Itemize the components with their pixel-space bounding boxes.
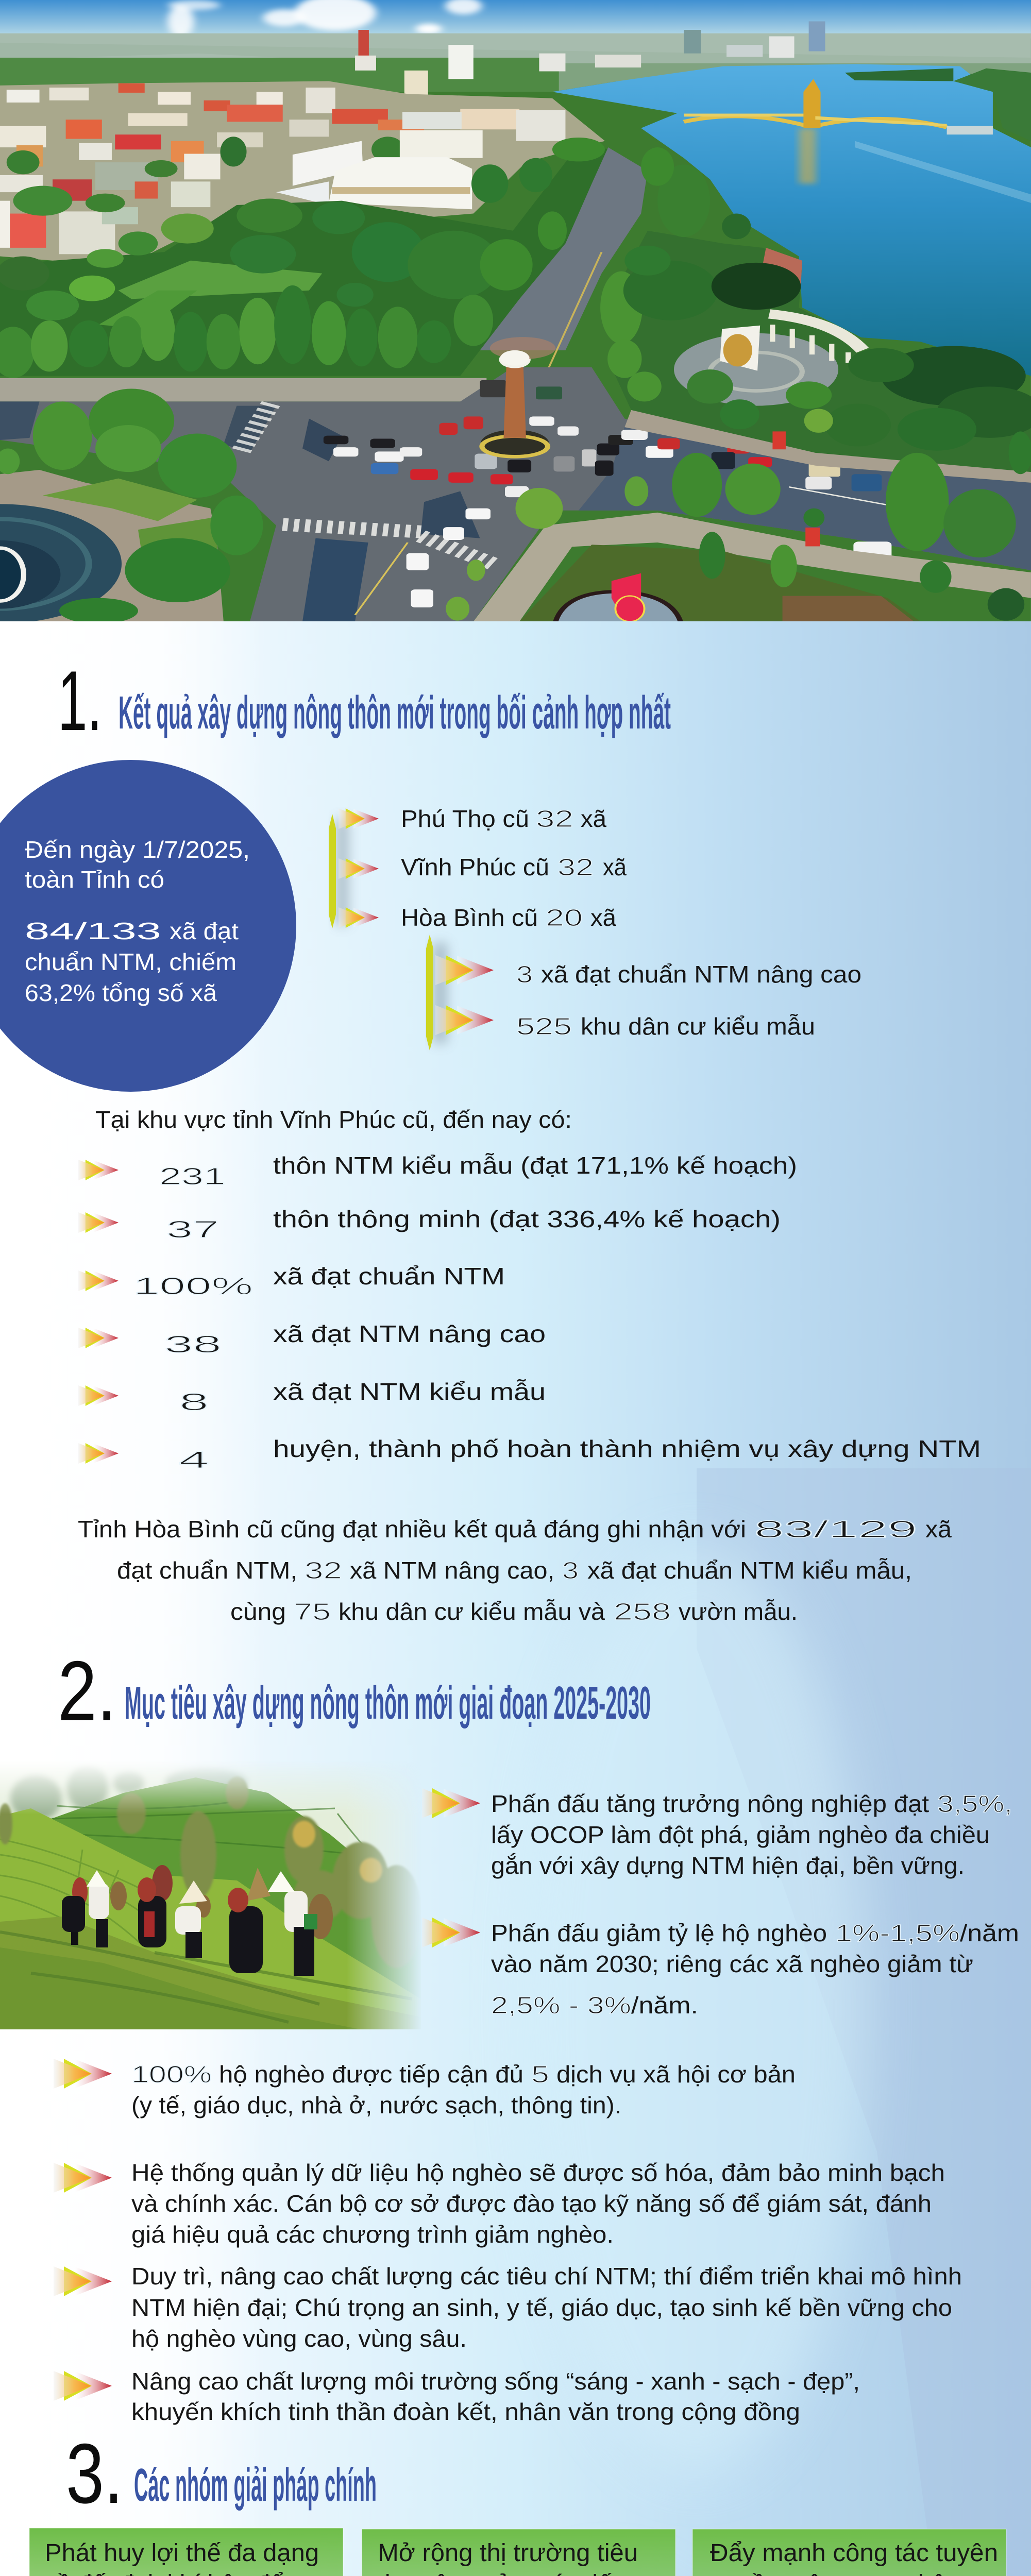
goals list: growth and poverty reduction: Phấn đấu giảm tỷ lệ hộ nghèo [491,1920,827,1946]
text block: Hoa Binh results: khu dân cư kiểu mẫu và [339,1598,605,1625]
tea pickers [62,1865,333,1976]
goals list: services, data, criteria, environment: dịch vụ xã hội cơ bản [556,2061,796,2088]
residential district [0,81,605,261]
text block: Hoa Binh results: xã [925,1516,952,1543]
goals list: growth and poverty reduction: 3,5%, [937,1790,1012,1817]
text: Các nhóm giải pháp chính [134,2460,377,2511]
stat list: Vinh Phuc figures: thôn NTM kiểu mẫu (đạt 171,1% kế hoạch) [273,1152,797,1179]
section 2 heading [58,1643,651,1738]
list: communes by former province [329,805,627,931]
goals list: growth and poverty reduction: Phấn đấu tăng trưởng nông nghiệp đạt [491,1790,929,1817]
text block: Hoa Binh results: cùng [230,1598,286,1625]
cars [324,380,891,607]
panel: province total circle: Đến ngày 1/7/2025, [25,836,250,863]
stat list: Vinh Phuc figures: 8 [179,1388,209,1415]
foreground promenade and lawn [474,513,1031,621]
distant city [0,22,1031,95]
text block: Hoa Binh results: 32 [305,1557,342,1584]
list: communes by former province: 20 [546,904,583,931]
text block: Hoa Binh results [78,1516,952,1625]
list: advanced communes and model residential areas: 525 [516,1013,572,1040]
text block: Hoa Binh results: xã đạt chuẩn NTM kiểu mẫu, [587,1557,912,1584]
panel: solution 3: Đẩy mạnh công tác tuyên [710,2539,998,2567]
stat list: Vinh Phuc figures: xã đạt NTM kiểu mẫu [273,1378,546,1405]
goals list: services, data, criteria, environment: và chính xác. Cán bộ cơ sở được đào tạo kỹ năng số để giám sát, đánh [131,2190,932,2217]
goals list: growth and poverty reduction [422,1788,1019,2019]
panel: province total circle [0,760,296,1092]
goals list: growth and poverty reduction: lấy OCOP làm đột phá, giảm nghèo đa chiều [491,1821,990,1848]
intersection asphalt [0,367,1031,621]
lake [552,64,1031,376]
panel: province total circle: 63,2% tổng số xã [25,979,217,1006]
monument tower [481,337,555,457]
stat list: Vinh Phuc figures: 231 [159,1163,226,1190]
list: communes by former province: xã [590,904,616,931]
stat list: Vinh Phuc figures: 100% [133,1273,253,1299]
list: communes by former province: 32 [557,854,594,880]
text block: Hoa Binh results: vườn mẫu. [679,1598,798,1625]
goals list: growth and poverty reduction: gắn với xây dựng NTM hiện đại, bền vững. [491,1852,965,1879]
list: communes by former province: 32 [536,805,573,832]
goals list: services, data, criteria, environment: NTM hiện đại; Chú trọng an sinh, y tế, giáo dục, tạo sinh kế bền vững cho [131,2294,952,2321]
panel: province total circle: toàn Tỉnh có [25,866,164,893]
text block: Hoa Binh results: 3 [562,1557,579,1584]
text block: Hoa Binh results: xã NTM nâng cao, [350,1557,554,1584]
list: communes by former province: Phú Thọ cũ [401,805,529,832]
stat list: Vinh Phuc figures: 37 [166,1216,219,1243]
text: Vinh Phuc intro: Tại khu vực tỉnh Vĩnh Phúc cũ, đến nay có: [95,1106,572,1133]
list: advanced communes and model residential areas: 3 [516,961,533,988]
civic white buildings [276,109,565,209]
goals list: services, data, criteria, environment: hộ nghèo vùng cao, vùng sâu. [131,2325,467,2352]
list: communes by former province: Vĩnh Phúc cũ [401,854,549,880]
hero photo: aerial view of city and lake [0,0,1031,623]
panel: province total circle: chuẩn NTM, chiếm [25,948,236,975]
list: communes by former province: xã [603,854,627,880]
section 3 heading: 3. [66,2426,123,2521]
goals list: services, data, criteria, environment: khuyến khích tinh thần đoàn kết, nhân văn trong cộng đồng [131,2398,800,2425]
panel: solution 1: Phát huy lợi thế đa dạng [45,2539,319,2567]
text block: Hoa Binh results: đạt chuẩn NTM, [117,1557,297,1584]
goals list: growth and poverty reduction: /năm [960,1920,1019,1946]
section 1 heading [58,653,671,748]
goals list: growth and poverty reduction: /năm. [631,1992,698,2019]
goals list: services, data, criteria, environment: Nâng cao chất lượng môi trường sống “sáng - xanh - sạch - đẹp”, [131,2368,860,2395]
stat list: Vinh Phuc figures: thôn thông minh (đạt 336,4% kế hoạch) [273,1206,781,1232]
section 1 heading: 1. [58,653,102,748]
text block: Hoa Binh results: 75 [294,1598,331,1625]
list: advanced communes and model residential areas [426,935,861,1050]
main road [480,147,648,388]
stat list: Vinh Phuc figures: 38 [164,1331,222,1358]
bridge [684,79,993,134]
text block: Hoa Binh results: 83/129 [754,1516,917,1543]
panel: solution 1 [29,2528,343,2576]
section 3 heading [66,2426,377,2521]
text block: Hoa Binh results: 258 [614,1598,671,1625]
list: communes by former province: Hòa Bình cũ [401,904,538,931]
lakeside park and colonnade [600,147,1031,483]
goals list: growth and poverty reduction: 2,5% - 3% [491,1992,631,2019]
goals list: services, data, criteria, environment: giá hiệu quả các chương trình giảm nghèo. [131,2221,614,2248]
goals list: services, data, criteria, environment: Hệ thống quản lý dữ liệu hộ nghèo sẽ được số hóa, đảm bảo minh bạch [131,2159,945,2186]
panel: solution 3 [692,2529,1006,2576]
stat list: Vinh Phuc figures: xã đạt chuẩn NTM [273,1263,505,1290]
panel: province total circle: 84/133 [25,918,161,944]
goals list: growth and poverty reduction: vào năm 2030; riêng các xã nghèo giảm từ [491,1951,973,1977]
list: advanced communes and model residential areas: khu dân cư kiểu mẫu [581,1013,815,1040]
text block: Hoa Binh results: Tỉnh Hòa Bình cũ cũng đạt nhiều kết quả đáng ghi nhận với [78,1516,746,1543]
stat list: Vinh Phuc figures: huyện, thành phố hoàn thành nhiệm vụ xây dựng NTM [273,1435,981,1462]
section 2 heading: 2. [58,1643,116,1738]
roadside trees [446,431,1031,621]
stat list: Vinh Phuc figures: 4 [179,1446,209,1473]
goals list: services, data, criteria, environment: hộ nghèo được tiếp cận đủ [219,2061,523,2088]
panel: solution 2: Mở rộng thị trường tiêu [378,2539,638,2567]
panel: solution 2 [362,2529,675,2576]
sky [0,0,1031,39]
goals list: services, data, criteria, environment: Duy trì, nâng cao chất lượng các tiêu chí NTM; thí điểm triển khai mô hình [131,2263,962,2290]
goals list: services, data, criteria, environment: (y tế, giáo dục, nhà ở, nước sạch, thông tin). [131,2092,621,2119]
goals list: services, data, criteria, environment [54,2059,962,2425]
goals list: services, data, criteria, environment: 5 [531,2061,549,2088]
stat list: Vinh Phuc figures: xã đạt NTM nâng cao [273,1320,546,1347]
list: communes by former province: xã [581,805,606,832]
bottom-left fountain and trees [0,388,263,623]
tree canopy mass [0,138,612,378]
goals list: services, data, criteria, environment: 100% [131,2061,212,2088]
list: advanced communes and model residential areas: xã đạt chuẩn NTM nâng cao [541,961,861,988]
panel: province total circle: xã đạt [170,918,239,944]
goals list: growth and poverty reduction: 1%-1,5% [835,1920,960,1946]
photo: women picking tea on green hills [0,1760,422,2029]
stat list: Vinh Phuc figures [78,1152,981,1473]
